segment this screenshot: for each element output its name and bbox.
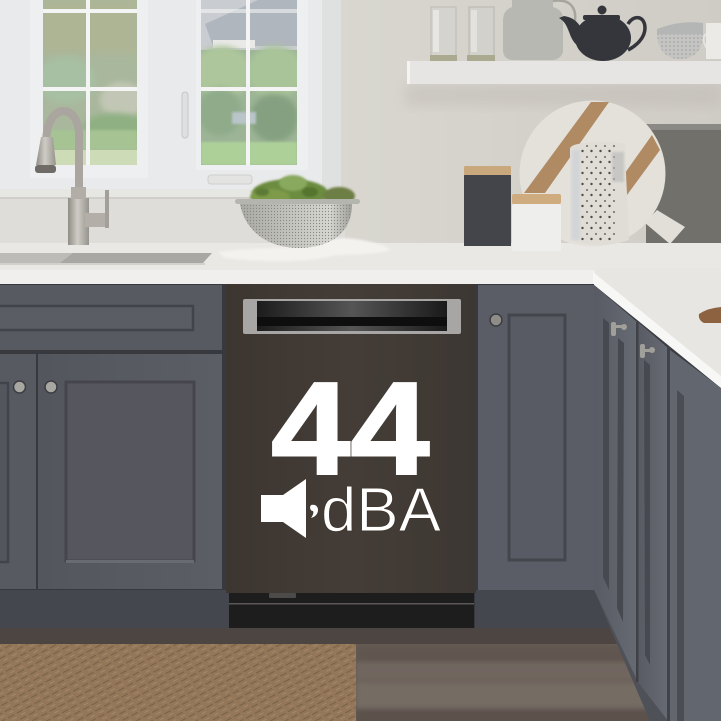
- faucet: [35, 111, 109, 245]
- left cabinets: [0, 285, 229, 628]
- cloth: [218, 238, 390, 261]
- base: [229, 593, 474, 628]
- knob left: [14, 381, 26, 393]
- rug: [0, 644, 356, 721]
- window: [0, 0, 341, 199]
- left door: [0, 354, 36, 589]
- cabinet backing: [0, 284, 594, 628]
- shelf shadow: [405, 84, 721, 106]
- dishwasher: [226, 284, 476, 628]
- sink: [0, 253, 212, 265]
- knob: [490, 314, 502, 326]
- white canister: [512, 194, 561, 251]
- door A: [594, 285, 637, 680]
- jug: [503, 0, 575, 60]
- number 44: 44: [271, 356, 430, 503]
- noise rating: [261, 356, 442, 545]
- wooden board on counter: [699, 307, 721, 323]
- bowls: [657, 22, 703, 59]
- glasses: [430, 7, 495, 61]
- pull B: [640, 344, 655, 358]
- lower floor corner: [594, 590, 668, 721]
- door C: [670, 350, 721, 721]
- mug: [704, 23, 721, 59]
- main door: [38, 354, 222, 589]
- wood inlay: [524, 102, 609, 193]
- door B: [638, 322, 668, 721]
- teapot: [559, 6, 645, 61]
- dark canister: [464, 166, 511, 246]
- colander: [235, 199, 360, 248]
- cutting board: [520, 100, 685, 246]
- right cabinet: [475, 285, 610, 628]
- round board: [520, 100, 666, 246]
- small stone board: [570, 142, 629, 245]
- window lock: [182, 92, 188, 138]
- right window pane: [201, 0, 297, 165]
- dishwasher door: [226, 284, 476, 593]
- knob right: [45, 381, 57, 393]
- speaker icon: [261, 479, 318, 538]
- pull A: [611, 322, 627, 336]
- wall: [0, 0, 721, 250]
- toe kick right: [475, 590, 610, 628]
- floor: [0, 628, 721, 721]
- grey tray: [646, 124, 721, 243]
- greens: [250, 175, 355, 207]
- unit dBA: dBA: [321, 476, 442, 545]
- window latch: [208, 175, 252, 184]
- left window pane: [43, 0, 137, 165]
- shelf items: [430, 0, 721, 61]
- board handle: [645, 210, 685, 244]
- drawer front: [0, 285, 222, 350]
- countertop: [0, 243, 721, 388]
- door panel: [509, 315, 565, 560]
- angled cabinets: [594, 285, 721, 721]
- shelf: [407, 61, 721, 84]
- wall under window: [0, 199, 345, 245]
- handle: [243, 299, 461, 334]
- salad bowl: [235, 175, 360, 248]
- toe kick: [0, 590, 229, 628]
